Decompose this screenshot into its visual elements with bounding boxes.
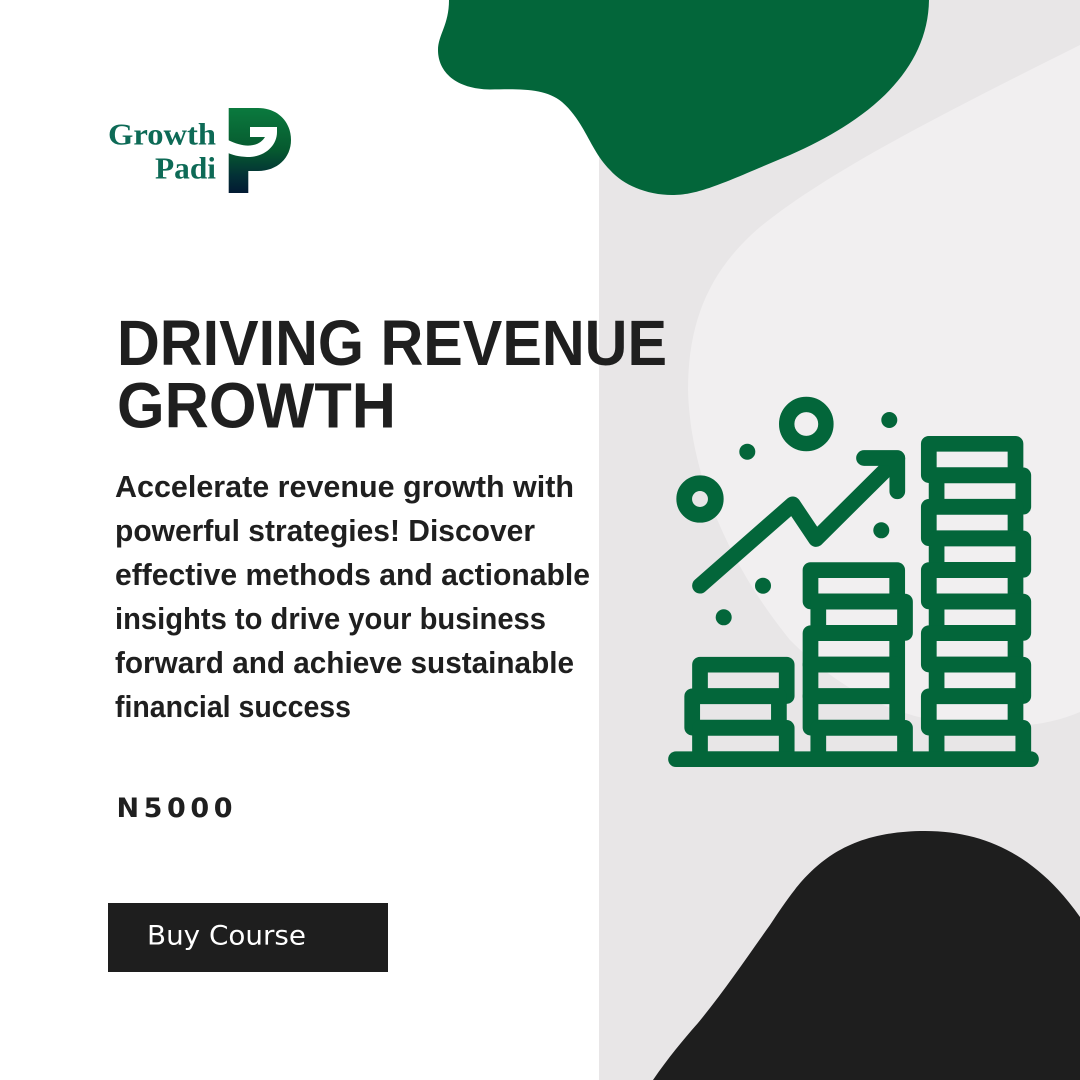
description text block: effective methods and actionable — [115, 557, 590, 592]
coin stack: tall — [929, 444, 1023, 759]
description text block: Accelerate revenue growth with — [115, 469, 574, 504]
description text block: powerful strategies! Discover — [115, 513, 535, 548]
logo: Growth Padi — [108, 108, 291, 193]
baseline — [676, 751, 1031, 767]
price: N5000 — [116, 793, 232, 824]
logo wordmark: Growth: Growth — [108, 116, 216, 151]
dots — [716, 412, 897, 625]
green blob — [438, 0, 929, 195]
description text block: financial success — [115, 689, 351, 724]
ring: large — [787, 404, 826, 444]
logo mark: G cut-out — [228, 127, 277, 157]
button: Buy Course — [108, 903, 388, 972]
title — [117, 307, 667, 442]
coin stack: medium — [810, 570, 905, 759]
logo wordmark: Padi: Padi — [155, 151, 216, 186]
growth arrow — [700, 458, 897, 586]
description text block: forward and achieve sustainable — [115, 645, 574, 680]
description text block — [115, 469, 590, 724]
title: GROWTH — [117, 370, 396, 442]
description text block: insights to drive your business — [115, 601, 546, 636]
icon: coin stacks with growth arrow — [676, 404, 1031, 759]
logo mark: P shape — [229, 108, 291, 193]
title: DRIVING REVENUE — [117, 307, 667, 379]
light grey blob — [688, 45, 1080, 727]
panel: right grey background — [599, 0, 1080, 1080]
ring: small — [684, 483, 716, 515]
button: Buy Course: Buy Course — [147, 920, 306, 951]
black blob — [653, 831, 1080, 1080]
coin stack: short — [692, 665, 787, 759]
